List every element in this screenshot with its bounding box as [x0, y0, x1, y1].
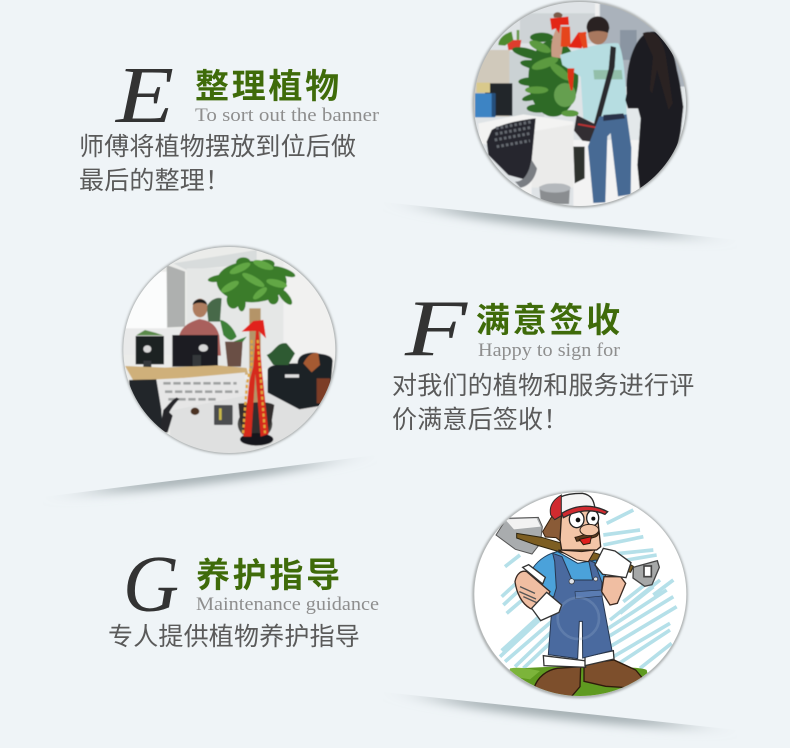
eyes — [569, 511, 584, 528]
body text: 专人提供植物养护指导 — [108, 623, 360, 651]
head — [560, 508, 601, 550]
hair — [542, 516, 561, 541]
left arm — [515, 571, 550, 612]
heading: 整理植物: 整理植物 — [195, 68, 342, 106]
section E: sort out — [79, 52, 380, 195]
shirt — [533, 552, 606, 597]
photo ring — [474, 2, 686, 206]
overalls — [548, 553, 612, 659]
right glove — [595, 548, 631, 578]
letter F: F — [404, 285, 468, 373]
photo scene — [123, 247, 336, 453]
shovel — [496, 517, 542, 554]
nose, moustache, mouth — [575, 531, 599, 541]
illustration ring — [474, 492, 686, 696]
body text: 价满意后签收！ — [392, 406, 568, 434]
section F: happy to sign for — [392, 285, 694, 434]
infographic canvas — [74, 0, 708, 733]
subheading: Happy to sign for — [478, 340, 621, 361]
subheading: To sort out the banner — [195, 105, 380, 126]
subheading: Maintenance guidance — [196, 594, 379, 615]
letter E: E — [115, 52, 174, 140]
photo scene — [474, 2, 686, 206]
shadow: top swoosh — [430, 199, 690, 243]
right arm — [602, 577, 626, 605]
heading: 满意签收: 满意签收 — [476, 302, 623, 340]
trouser cuffs — [543, 656, 586, 667]
blue scribbles — [500, 510, 677, 668]
cap — [551, 493, 595, 519]
shadow: middle swoosh — [90, 454, 330, 498]
body text: 最后的整理！ — [79, 167, 230, 195]
boots — [534, 667, 581, 698]
shadow: bottom swoosh — [430, 689, 690, 733]
body text: 对我们的植物和服务进行评 — [392, 372, 694, 400]
illustration: cartoon gardener — [471, 490, 689, 700]
photo ring — [124, 248, 335, 452]
photo: worker arranging plant in office — [471, 0, 689, 209]
cartoon scene — [474, 492, 686, 696]
body text: 师傅将植物摆放到位后做 — [79, 133, 356, 161]
letter G: G — [123, 541, 179, 629]
section G: maintenance guidance — [108, 541, 379, 651]
heading: 养护指导: 养护指导 — [196, 557, 343, 595]
photo: man at desk with money tree — [121, 244, 338, 456]
